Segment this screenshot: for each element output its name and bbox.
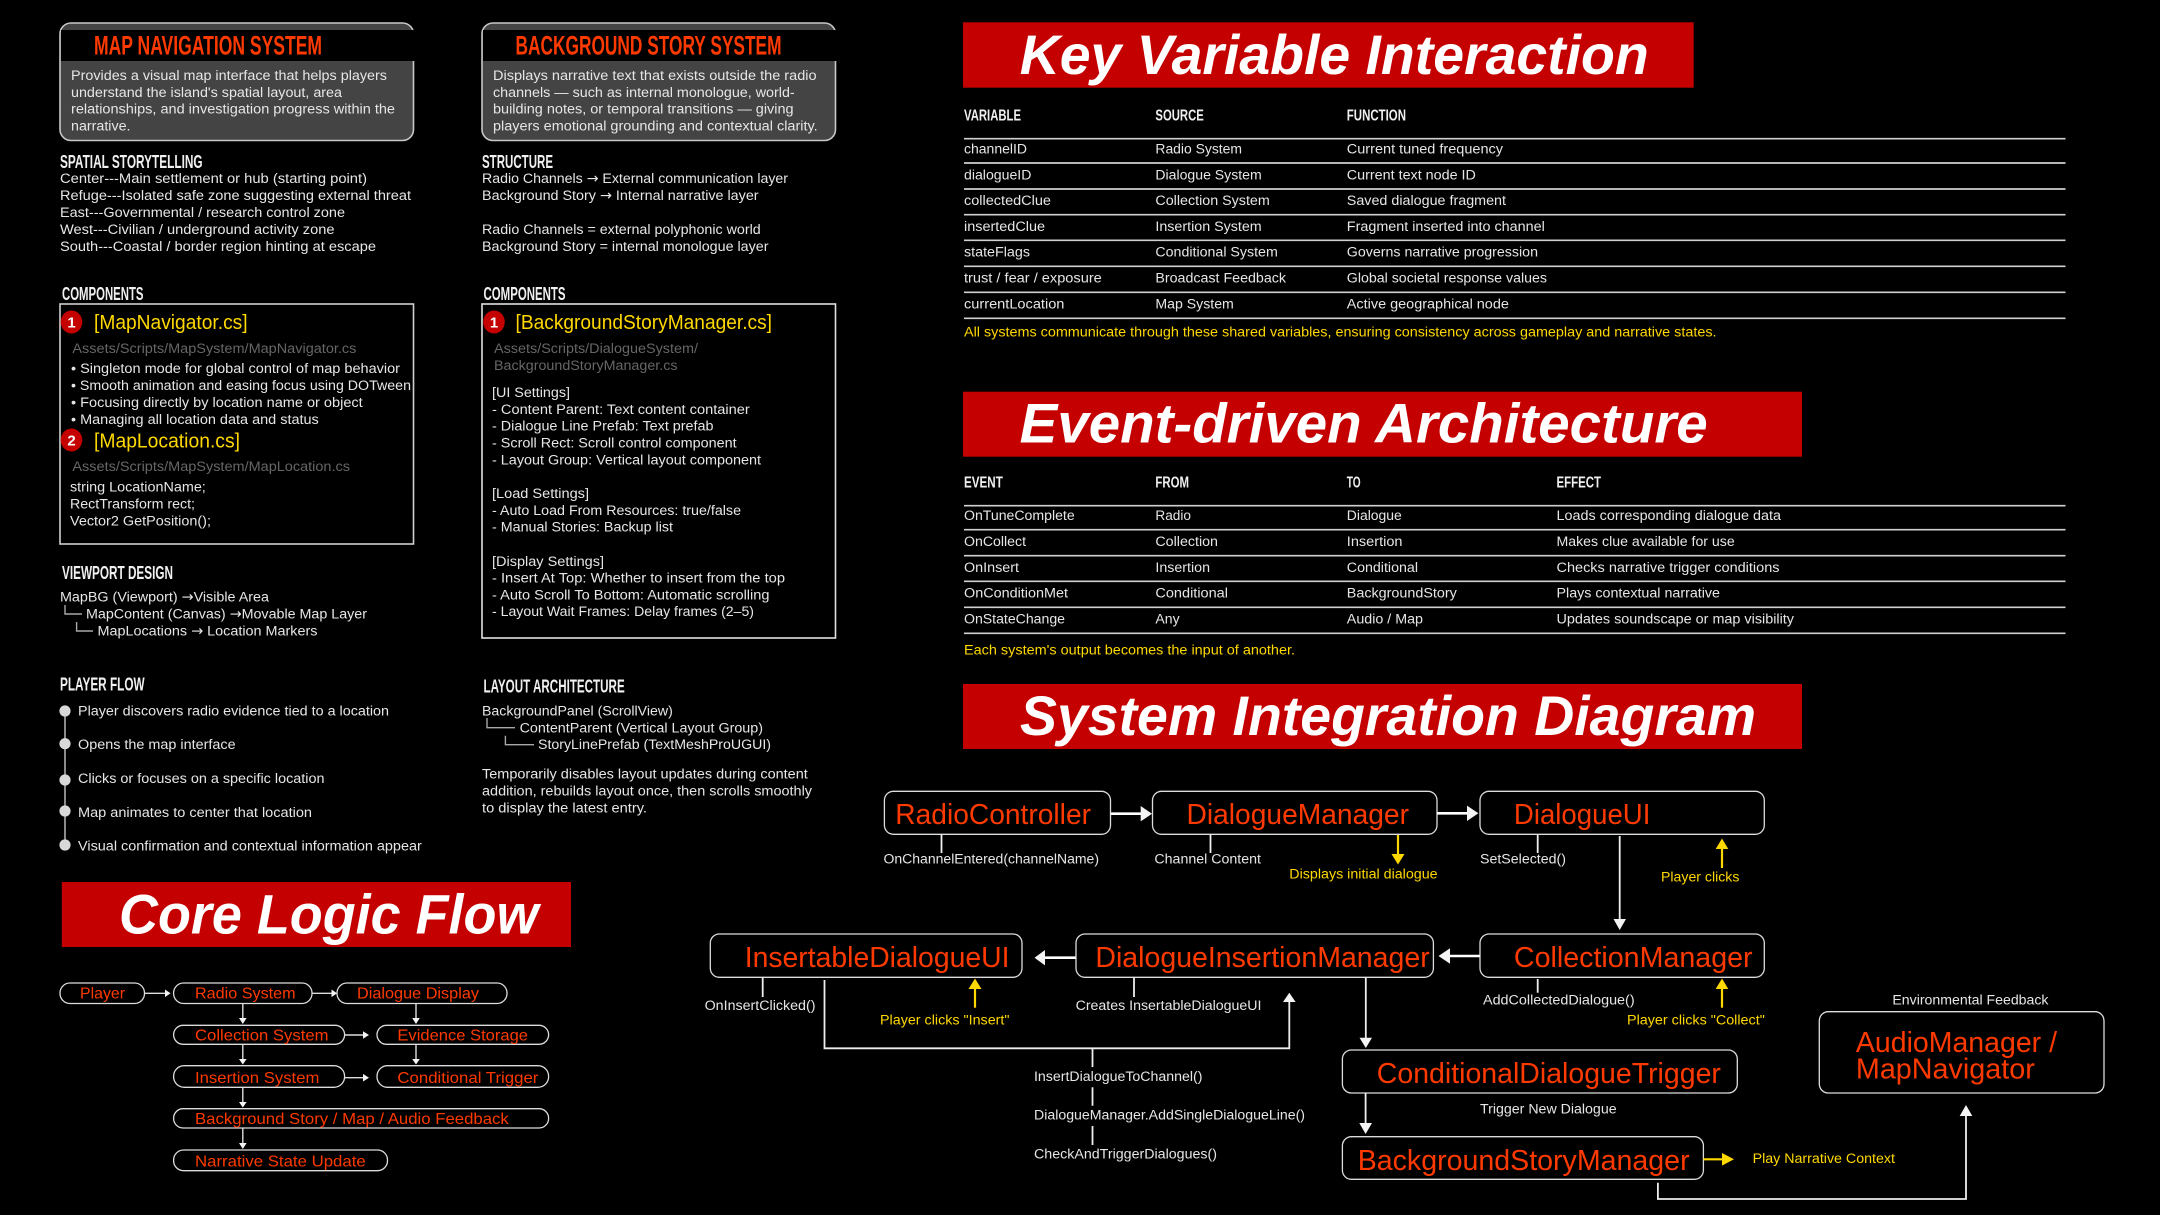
yellow arrow: player clicks [1716, 838, 1728, 868]
text block: spatial storytelling: West---Civilian / underground activity zone [60, 222, 335, 238]
timeline: player flow: Player discovers radio evidence tied to a location [78, 704, 389, 720]
row: OnCollect [964, 534, 1735, 550]
heading: components (map): COMPONENTS [62, 284, 144, 304]
table header [964, 475, 1601, 492]
yellow arrow: player clicks collect [1716, 978, 1728, 1008]
node: collection system [174, 1025, 345, 1044]
text block: spatial storytelling: South---Coastal / border region hinting at escape [60, 239, 376, 255]
node: RadioController [884, 791, 1110, 834]
row: OnStateChange [964, 612, 1795, 628]
node: insertion system [174, 1066, 345, 1087]
row: stateFlags: stateFlags [964, 245, 1030, 261]
row: channelID: channelID [964, 142, 1027, 158]
row: trust / fear / exposure: Broadcast Feedback [1155, 271, 1287, 287]
text block: viewport design: MapContent (Canvas) →Movable Map Layer [86, 607, 367, 623]
label: Play Narrative Context: Play Narrative Context [1753, 1151, 1895, 1167]
label: OnChannelEntered: OnChannelEntered(channelName) [884, 852, 1099, 868]
text block: map navigation description: narrative. [71, 118, 130, 134]
node: AudioManager / MapNavigator: MapNavigator [1856, 1054, 2035, 1086]
node: conditional trigger: Conditional Trigger [397, 1070, 539, 1087]
flowchart: core logic flow [60, 983, 549, 1171]
label: Player clicks Collect: Player clicks "Collect" [1627, 1013, 1765, 1029]
row: currentLocation: Active geographical node [1347, 297, 1509, 313]
text block: layout architecture: BackgroundPanel (ScrollView) [482, 704, 673, 720]
text block: structure [482, 152, 788, 255]
node: evidence storage: Evidence Storage [397, 1027, 528, 1044]
bullet list: MapNavigator features [71, 361, 411, 428]
code: MapLocation members: Vector2 GetPosition(); [70, 513, 211, 529]
settings: UI: - Dialogue Line Prefab: Text prefab [492, 419, 714, 435]
settings: display: - Layout Wait Frames: Delay frames (2–5) [492, 604, 754, 620]
heading: map navigation system: MAP NAVIGATION SYSTEM [94, 31, 322, 61]
row: OnTuneComplete: Loads corresponding dialogue data [1556, 508, 1781, 524]
settings: display: - Auto Scroll To Bottom: Automatic scrolling [492, 587, 770, 603]
arrow: ConditionalDialogueTrigger to BackgroundStoryManager [1359, 1093, 1372, 1134]
label: Player clicks Insert: Player clicks "Insert" [880, 1013, 1010, 1029]
settings: UI: [UI Settings] [492, 385, 570, 401]
table header [964, 108, 1406, 125]
file path: BackgroundStoryManager [494, 341, 698, 374]
text block: background story description: building notes, or temporal transitions — giving [493, 102, 794, 118]
arrows: core flow connectors [144, 990, 420, 1149]
text block: layout architecture [482, 677, 813, 816]
row: OnConditionMet: OnConditionMet [964, 586, 1068, 602]
badge: 1 [483, 310, 505, 334]
row: collectedClue: collectedClue [964, 193, 1051, 209]
text block: background story description: Displays narrative text that exists outside the radio [493, 68, 817, 84]
settings: UI: - Scroll Rect: Scroll control component [492, 435, 737, 451]
timeline: player flow [59, 675, 422, 855]
text block: background story description [493, 68, 818, 134]
timeline: player flow: Clicks or focuses on a specific location [78, 771, 324, 787]
text block: layout architecture: addition, rebuilds layout once, then scrolls smoothly [482, 784, 813, 800]
node: DialogueUI [1480, 791, 1764, 834]
code: MapLocation members: RectTransform rect; [70, 496, 195, 512]
arrow: DialogueInsertionManager to ConditionalDialogueTrigger [1360, 977, 1372, 1048]
label: CheckAndTriggerDialogues: CheckAndTriggerDialogues() [1034, 1147, 1217, 1163]
row: OnStateChange: Any [1155, 612, 1180, 628]
node: ConditionalDialogueTrigger: ConditionalDialogueTrigger [1377, 1058, 1721, 1090]
row: collectedClue [964, 193, 1506, 209]
row: OnInsert: OnInsert [964, 560, 1019, 576]
row: OnConditionMet [964, 586, 1720, 602]
text block: spatial storytelling: Refuge---Isolated safe zone suggesting external threat [60, 188, 411, 204]
panel: background story system header [482, 23, 837, 140]
node: radio system: Radio System [195, 986, 296, 1003]
node: DialogueUI: DialogueUI [1514, 799, 1650, 831]
row: currentLocation [964, 297, 1509, 313]
row: OnInsert [964, 560, 1780, 576]
settings: display: [Display Settings] [492, 554, 604, 570]
row: dialogueID: Current text node ID [1347, 167, 1476, 183]
label: OnInsertClicked: OnInsertClicked() [705, 998, 816, 1014]
node: player [60, 983, 144, 1004]
settings: load: [Load Settings] [492, 486, 589, 502]
panel: background story components [482, 304, 836, 638]
badge: 1: 1 [490, 314, 498, 332]
node: evidence storage [377, 1025, 549, 1044]
node: BackgroundStoryManager: BackgroundStoryManager [1358, 1145, 1690, 1177]
node: InsertableDialogueUI [710, 934, 1022, 977]
row: trust / fear / exposure: Global societal response values [1347, 271, 1547, 287]
row: OnTuneComplete: Dialogue [1347, 508, 1402, 524]
settings: display: - Insert At Top: Whether to insert from the top [492, 571, 785, 587]
timeline: player flow: Map animates to center that location [78, 805, 312, 821]
row: OnTuneComplete [964, 508, 1781, 524]
panel: map navigation system header [60, 23, 415, 140]
heading: layout architecture: LAYOUT ARCHITECTURE [484, 677, 625, 697]
table header: EVENT [964, 475, 1003, 492]
banner: key variable interaction: Key Variable Interaction [1020, 23, 1649, 86]
label: Trigger New Dialogue: Trigger New Dialogue [1480, 1102, 1617, 1118]
table header: FUNCTION [1347, 108, 1406, 125]
node: AudioManager / MapNavigator: AudioManager / [1856, 1027, 2058, 1059]
timeline: player flow: Visual confirmation and contextual information appear [78, 839, 422, 855]
table: events [964, 475, 2066, 658]
node: insertion system: Insertion System [195, 1070, 319, 1087]
row: channelID [964, 142, 1504, 158]
node: DialogueInsertionManager [1076, 934, 1433, 977]
connector ticks [763, 834, 1538, 1145]
text block: layout architecture: Temporarily disables layout updates during content [482, 767, 808, 783]
heading: background story system: BACKGROUND STORY SYSTEM [516, 31, 782, 61]
row: collectedClue: Collection System [1155, 193, 1270, 209]
settings: load: - Auto Load From Resources: true/false [492, 503, 741, 519]
bullet list: MapNavigator features: • Managing all location data and status [71, 412, 319, 428]
component name: MapNavigator: [MapNavigator.cs] [94, 312, 248, 334]
banner: event-driven architecture: Event-driven Architecture [1020, 392, 1708, 455]
text block: background story description: players emotional grounding and contextual clarity. [493, 118, 818, 134]
text block: map navigation description: relationships, and investigation progress within the [71, 102, 395, 118]
text block: viewport design: MapBG (Viewport) →Visible Area [60, 590, 269, 606]
arrow: BackgroundStoryManager to AudioManager [1658, 1105, 1972, 1199]
node: CollectionManager: CollectionManager [1514, 942, 1753, 974]
row: OnStateChange: Updates soundscape or map visibility [1556, 612, 1795, 628]
row: dialogueID [964, 167, 1476, 183]
text block: viewport design [60, 563, 367, 640]
arrow: RadioController to DialogueManager [1110, 806, 1152, 821]
row: insertedClue [964, 219, 1545, 235]
bullet list: MapNavigator features: • Smooth animation and easing focus using DOTween [71, 378, 411, 394]
file path: BackgroundStoryManager: BackgroundStoryManager.cs [494, 358, 678, 374]
row: dialogueID: dialogueID [964, 167, 1031, 183]
row: OnInsert: Conditional [1347, 560, 1418, 576]
row: trust / fear / exposure: trust / fear / exposure [964, 271, 1102, 287]
row: stateFlags: Conditional System [1155, 245, 1278, 261]
row: currentLocation: currentLocation [964, 297, 1064, 313]
badge: 2 [61, 428, 82, 452]
row: OnInsert: Insertion [1155, 560, 1210, 576]
row: currentLocation: Map System [1155, 297, 1234, 313]
row: dialogueID: Dialogue System [1155, 167, 1262, 183]
heading: components (background story): COMPONENTS [484, 284, 566, 304]
bullet list: MapNavigator features: • Focusing directly by location name or object [71, 395, 363, 411]
node: collection system: Collection System [195, 1027, 328, 1044]
row: channelID: Radio System [1155, 142, 1242, 158]
node: radio system [174, 983, 312, 1004]
settings: load: - Manual Stories: Backup list [492, 520, 673, 536]
text block: structure: Radio Channels = external polyphonic world [482, 222, 761, 238]
file path: BackgroundStoryManager: Assets/Scripts/DialogueSystem/ [494, 341, 698, 357]
settings: UI [492, 385, 761, 468]
label: Channel Content: Channel Content [1154, 852, 1261, 868]
row: stateFlags [964, 245, 1538, 261]
text block: structure: Background Story = internal monologue layer [482, 239, 769, 255]
file path: MapLocation: Assets/Scripts/MapSystem/MapLocation.cs [72, 459, 350, 475]
heading: viewport design: VIEWPORT DESIGN [62, 563, 173, 583]
text block: layout architecture: ContentParent (Vertical Layout Group) [520, 720, 763, 736]
row: OnInsert: Checks narrative trigger conditions [1556, 560, 1780, 576]
yellow arrow: player clicks insert [968, 978, 982, 1008]
row: OnCollect: Collection [1155, 534, 1218, 550]
label: AddCollectedDialogue: AddCollectedDialogue() [1483, 992, 1635, 1008]
table header: SOURCE [1155, 108, 1204, 125]
node: ConditionalDialogueTrigger [1342, 1050, 1737, 1093]
text block: map navigation description [71, 68, 395, 134]
timeline: player flow: Opens the map interface [78, 737, 236, 753]
text block: structure: Background Story → Internal narrative layer [482, 188, 759, 204]
text block: map navigation description: understand the island's spatial layout, area [71, 85, 342, 101]
yellow arrow: play narrative context [1703, 1153, 1734, 1166]
row: OnConditionMet: Conditional [1155, 586, 1228, 602]
row: OnConditionMet: Plays contextual narrative [1556, 586, 1720, 602]
text block: layout architecture: to display the latest entry. [482, 800, 647, 816]
table: key variables [964, 108, 2066, 340]
row: insertedClue: Fragment inserted into channel [1347, 219, 1545, 235]
banner: core logic flow: Core Logic Flow [119, 882, 542, 945]
label: SetSelected: SetSelected() [1480, 852, 1566, 868]
text block: spatial storytelling: East---Governmental / research control zone [60, 205, 345, 221]
node: conditional trigger [377, 1066, 549, 1087]
heading: spatial storytelling: SPATIAL STORYTELLING [60, 152, 203, 172]
diagram: system integration [705, 791, 2104, 1199]
node: background story / map / audio feedback: Background Story / Map / Audio Feedback [195, 1111, 510, 1128]
arrow: DialogueManager to DialogueUI [1437, 806, 1478, 821]
component name: BackgroundStoryManager: [BackgroundStoryManager.cs] [516, 312, 772, 334]
settings: UI: - Content Parent: Text content container [492, 402, 750, 418]
label: InsertDialogueToChannel: InsertDialogueToChannel() [1034, 1069, 1202, 1085]
row: OnConditionMet: BackgroundStory [1347, 586, 1458, 602]
row: channelID: Current tuned frequency [1347, 142, 1504, 158]
table header: TO [1347, 475, 1361, 492]
node: DialogueManager: DialogueManager [1186, 799, 1409, 831]
row: insertedClue: insertedClue [964, 219, 1045, 235]
settings: display [492, 554, 785, 620]
heading: player flow: PLAYER FLOW [60, 675, 145, 695]
label: Creates InsertableDialogueUI: Creates InsertableDialogueUI [1076, 998, 1262, 1014]
row: collectedClue: Saved dialogue fragment [1347, 193, 1506, 209]
text block: layout architecture: StoryLinePrefab (TextMeshProUGUI) [538, 737, 771, 753]
row: stateFlags: Governs narrative progression [1347, 245, 1538, 261]
settings: UI: - Layout Group: Vertical layout component [492, 452, 761, 468]
row: OnTuneComplete: Radio [1155, 508, 1191, 524]
text block: viewport design: MapLocations → Location Markers [98, 624, 318, 640]
yellow arrow: displays initial dialogue [1392, 835, 1404, 864]
code: MapLocation members [70, 480, 211, 529]
row: OnStateChange: Audio / Map [1347, 612, 1423, 628]
label: Displays initial dialogue: Displays initial dialogue [1289, 866, 1438, 882]
row: OnCollect: Insertion [1347, 534, 1402, 550]
arrow: InsertableDialogueUI feedback to DialogueInsertionManager [824, 980, 1296, 1048]
file path: MapNavigator: Assets/Scripts/MapSystem/MapNavigator.cs [72, 341, 356, 357]
node: DialogueInsertionManager: DialogueInsertionManager [1095, 942, 1430, 974]
row: OnCollect: Makes clue available for use [1556, 534, 1735, 550]
text block: spatial storytelling: Center---Main settlement or hub (starting point) [60, 171, 367, 187]
label: Environmental Feedback: Environmental Feedback [1892, 992, 2049, 1008]
arrow: DialogueUI to CollectionManager [1614, 836, 1626, 930]
heading: structure: STRUCTURE [482, 152, 553, 172]
node: InsertableDialogueUI: InsertableDialogueUI [745, 942, 1010, 974]
badge: 2: 2 [67, 432, 76, 450]
arrow: DialogueInsertionManager to InsertableDialogueUI [1034, 950, 1076, 965]
row: trust / fear / exposure [964, 271, 1547, 287]
text block: map navigation description: Provides a visual map interface that helps players [71, 68, 387, 84]
table header: VARIABLE [964, 108, 1021, 125]
node: AudioManager / MapNavigator [1819, 1012, 2104, 1093]
table header: FROM [1155, 475, 1189, 492]
label: Player clicks: Player clicks [1661, 870, 1739, 886]
banner: system integration diagram: System Integration Diagram [1020, 684, 1756, 747]
label: AddSingleDialogueLine: DialogueManager.AddSingleDialogueLine() [1034, 1107, 1305, 1123]
text block: background story description: channels — such as internal monologue, world- [493, 85, 795, 101]
badge: 1 [61, 310, 82, 334]
node: RadioController: RadioController [895, 799, 1091, 831]
node: CollectionManager [1480, 934, 1764, 977]
badge: 1: 1 [67, 314, 76, 332]
code: MapLocation members: string LocationName; [70, 480, 206, 496]
settings: load [492, 486, 741, 536]
row: OnStateChange: OnStateChange [964, 612, 1065, 628]
table note: Each system's output becomes the input of another. [964, 642, 1295, 658]
component name: MapLocation: [MapLocation.cs] [94, 430, 240, 452]
row: OnCollect: OnCollect [964, 534, 1026, 550]
panel: map components [60, 304, 414, 544]
text block: structure: Radio Channels → External communication layer [482, 171, 788, 187]
table header: EFFECT [1556, 475, 1601, 492]
table note: All systems communicate through these shared variables, ensuring consistency across gameplay and narrative states. [964, 324, 1716, 340]
arrow: CollectionManager to DialogueInsertionManager [1438, 948, 1480, 964]
node: dialogue display [337, 983, 507, 1004]
node: narrative state update: Narrative State Update [195, 1154, 366, 1170]
node: narrative state update [174, 1150, 388, 1171]
node: dialogue display: Dialogue Display [357, 986, 479, 1003]
text block: spatial storytelling [60, 152, 411, 255]
row: insertedClue: Insertion System [1155, 219, 1262, 235]
node: player: Player [80, 986, 126, 1003]
row: OnTuneComplete: OnTuneComplete [964, 508, 1075, 524]
node: DialogueManager [1152, 791, 1437, 834]
bullet list: MapNavigator features: • Singleton mode for global control of map behavior [71, 361, 400, 377]
